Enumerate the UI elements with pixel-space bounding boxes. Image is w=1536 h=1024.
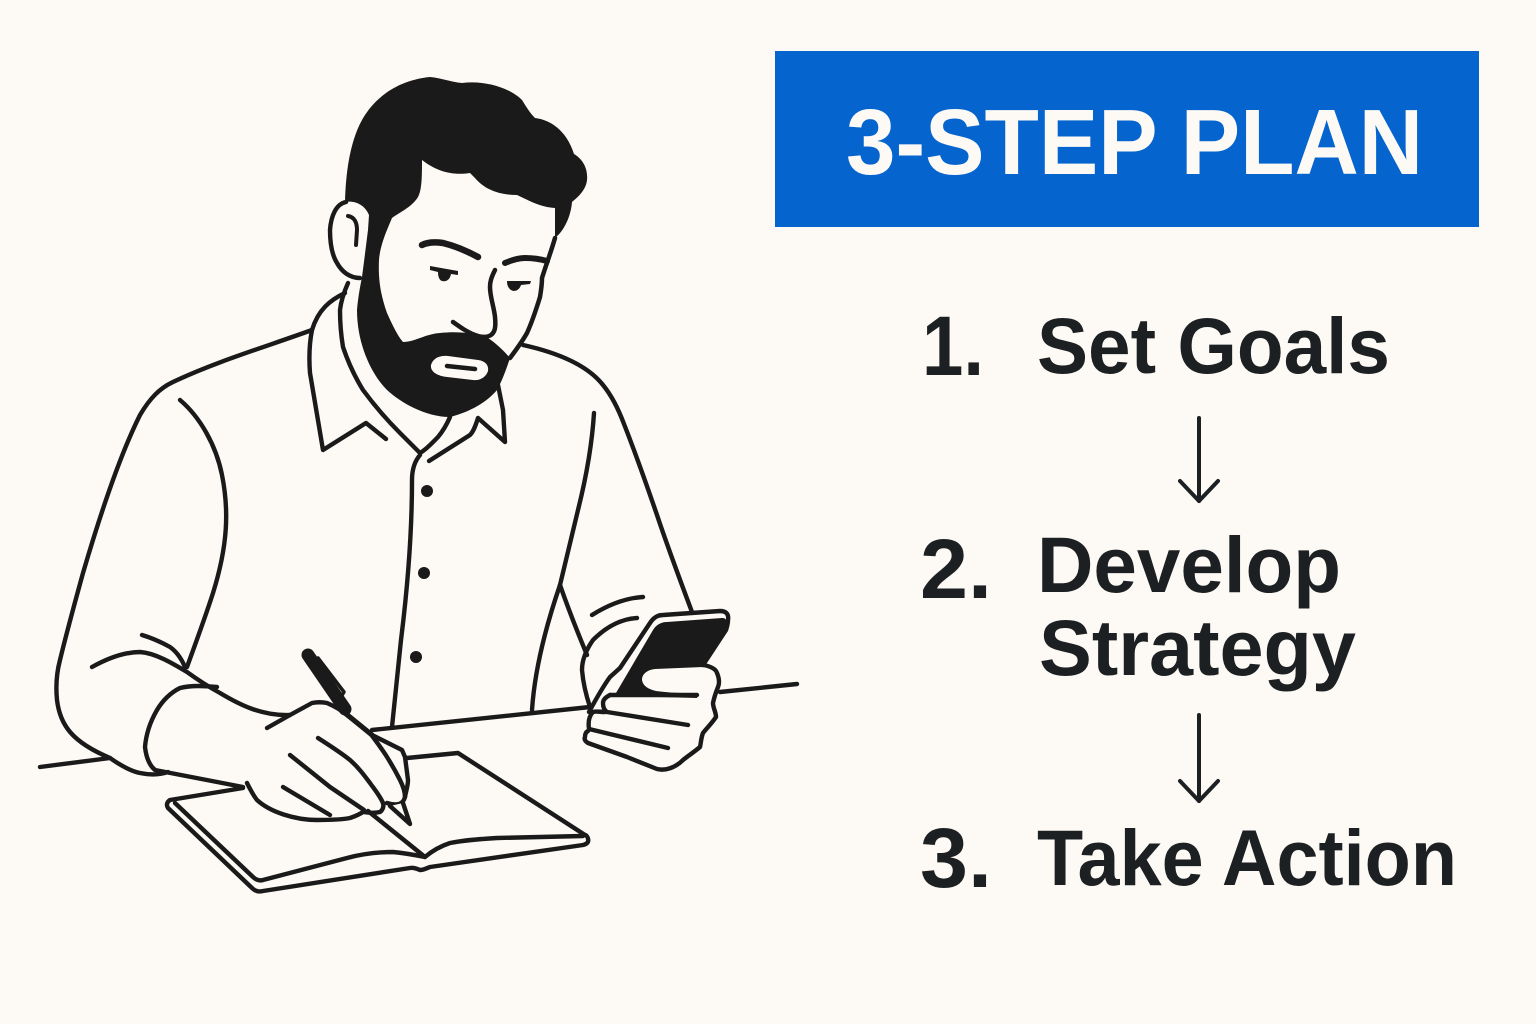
thumb [372,735,408,797]
pen barrel [308,655,345,709]
face right contour [510,238,555,358]
phone screen [616,618,726,698]
step 1: Set Goals [922,299,1390,393]
arrow: step 1 to step 2 [1180,418,1218,501]
lip line [447,366,475,369]
hand back and knuckles [267,702,405,804]
hand outline [585,665,719,770]
phone outline [589,611,728,712]
step 3: Take Action: 3. [920,811,992,905]
illustration: man writing and holding phone [40,77,797,891]
mouth [431,356,488,380]
step 3: Take Action: Take Action [1037,813,1457,902]
title text: 3-STEP PLAN [846,90,1423,194]
palm arc [582,618,637,707]
shirt body and sleeves [56,330,692,774]
pen nib [390,803,410,824]
table edge [40,684,797,767]
thumb line [610,693,697,697]
ear inner fold [348,216,357,245]
shirt buttons [410,485,433,663]
left eyebrow [422,242,478,257]
step 2: Develop Strategy: Strategy [1039,603,1356,692]
ear [330,202,360,278]
notebook [167,753,588,891]
fingers [318,738,383,803]
title banner [775,51,1479,227]
collar [309,283,505,461]
nose [453,270,495,337]
pen shaft [345,713,372,735]
head, hair and beard [330,77,587,417]
phone and holding hand [582,611,728,770]
palm underside [247,783,383,820]
step 2: Develop Strategy: Develop [1037,520,1341,609]
step 2: Develop Strategy [920,520,1356,692]
hair and beard silhouette [345,77,587,417]
cuff [145,686,243,787]
pen clip [318,658,344,702]
writing hand and pen [145,655,410,824]
step 2: Develop Strategy: 2. [920,522,992,616]
step 1: Set Goals: 1. [922,299,984,393]
left eye [430,266,458,281]
arrow: step 2 to step 3 [1180,715,1218,801]
step 1: Set Goals: Set Goals [1037,301,1390,390]
index finger [603,695,688,725]
right eye [507,281,531,291]
right eyebrow [505,258,547,263]
second finger [589,712,668,748]
